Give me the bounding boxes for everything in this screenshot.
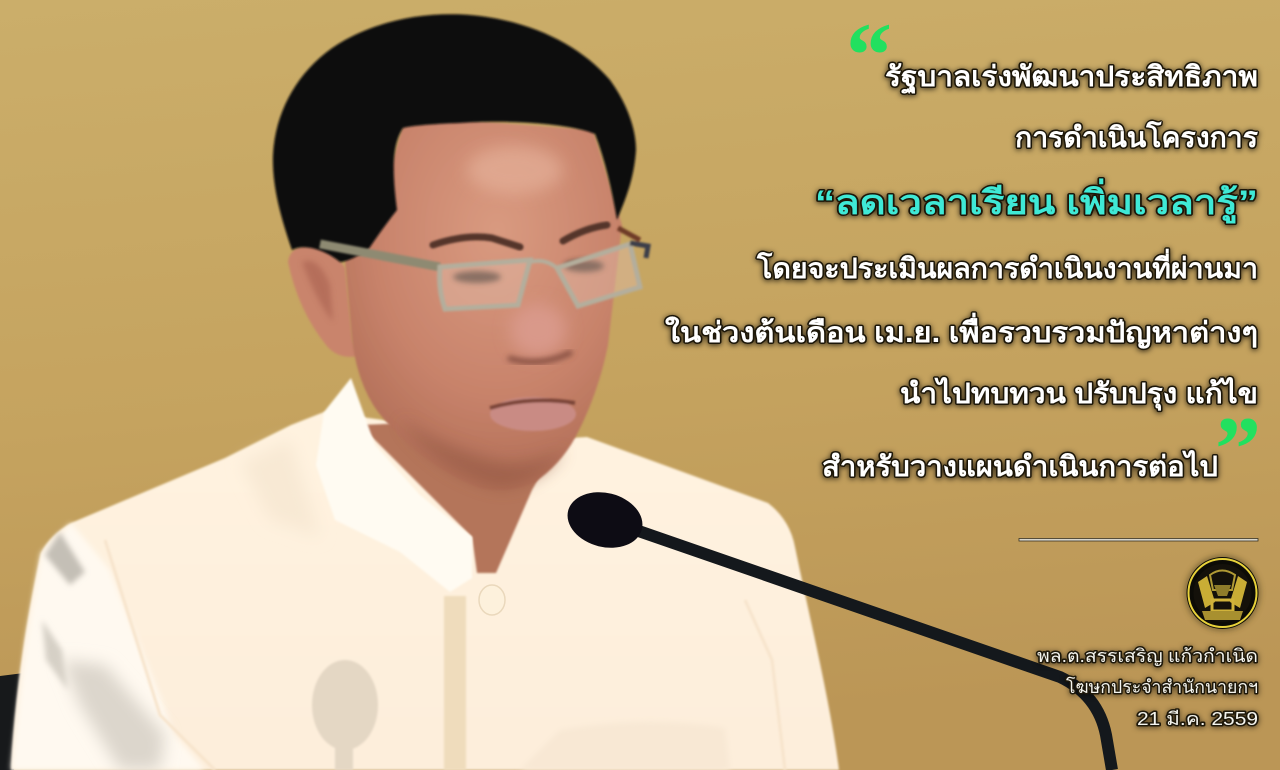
jacket	[11, 412, 839, 770]
mouth	[490, 397, 576, 431]
quote line 7: สำหรับวางแผนดำเนินการต่อไป	[822, 450, 1218, 482]
jaw shadow	[400, 420, 565, 488]
button	[479, 585, 505, 615]
date: 21 มี.ค. 2559	[1137, 709, 1258, 729]
nose	[508, 304, 572, 362]
photo: speaker	[11, 14, 839, 770]
opening quote mark: “	[846, 4, 892, 106]
collar	[316, 378, 472, 592]
icon: government seal	[1184, 555, 1260, 631]
position: โฆษกประจำสำนักนายกฯ	[1066, 676, 1258, 697]
highlighted project name: “ลดเวลาเรียน เพิ่มเวลารู้”	[815, 178, 1258, 224]
quote line 2: การดำเนินโครงการ	[1015, 120, 1258, 153]
quote line 4: โดยจะประเมินผลการดำเนินงานที่ผ่านมา	[756, 248, 1258, 284]
spokesperson credit	[1037, 646, 1258, 729]
quote line 5: ในช่วงต้นเดือน เม.ย. เพื่อรวบรวมปัญหาต่างๆ	[665, 312, 1258, 349]
name: พล.ต.สรรเสริญ แก้วกำเนิด	[1037, 646, 1258, 666]
hair	[273, 14, 636, 262]
eyebrows	[433, 225, 607, 247]
chair back	[0, 673, 29, 770]
quote line 1: รัฐบาลเร่งพัฒนาประสิทธิภาพ	[885, 61, 1258, 95]
face	[345, 120, 622, 490]
ear	[288, 245, 358, 357]
divider line	[1019, 538, 1258, 541]
forehead highlight	[467, 146, 563, 194]
microphone	[562, 485, 1112, 770]
quote text block	[665, 4, 1261, 500]
placket	[444, 596, 466, 770]
closing quote mark: ”	[1215, 398, 1261, 500]
glasses	[320, 228, 648, 309]
quote line 6: นำไปทบทวน ปรับปรุง แก้ไข	[900, 377, 1258, 411]
neck	[360, 420, 560, 573]
pocket pen shadow	[312, 660, 378, 770]
eyes	[453, 260, 604, 283]
